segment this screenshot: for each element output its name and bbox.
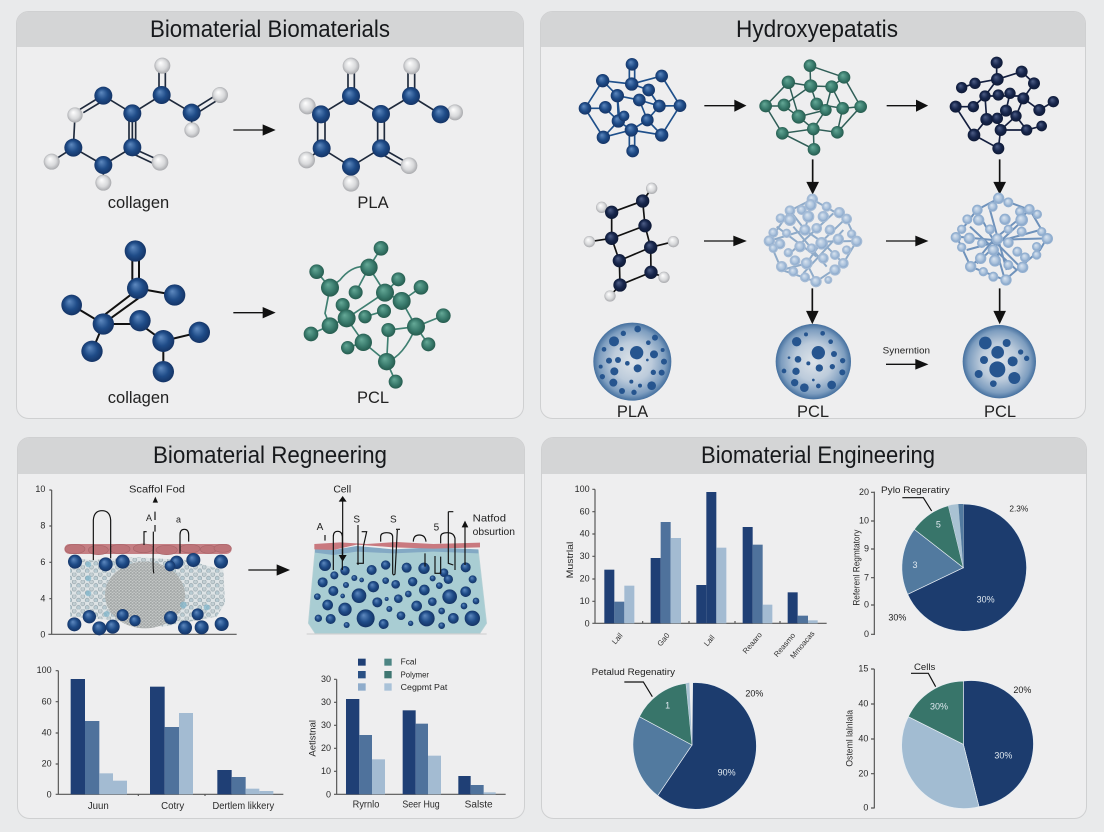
arrow xyxy=(233,308,274,317)
diagram: cell-seeded scaffold: A xyxy=(317,522,324,533)
arrow xyxy=(808,159,818,193)
axis title: Referenl Regmtatory xyxy=(852,529,862,606)
pie chart: cells: 40 xyxy=(858,734,868,744)
pie chart: regeneratory: 10 xyxy=(859,516,869,526)
label: scaffold: Scaffol Fod xyxy=(129,485,185,496)
molecule: PLA xyxy=(298,58,463,192)
heading: Hydroxyepatatis xyxy=(736,16,898,43)
arrow xyxy=(248,565,288,575)
pie chart: regeneratory: 20 xyxy=(859,487,869,497)
arrow xyxy=(807,288,817,322)
bar chart: right: 20 xyxy=(321,743,331,753)
pie chart: cells: 40 xyxy=(858,699,868,709)
molecule: green cluster xyxy=(759,59,867,156)
panel: Biomaterial Engineering xyxy=(542,438,1086,818)
diagram: scaffold cross-section: 8 xyxy=(40,521,45,531)
molecule: dark cluster xyxy=(950,57,1059,154)
diagram: cell-seeded scaffold: 5 xyxy=(434,523,440,534)
bar chart: left: 60 xyxy=(42,696,52,706)
panel: Biomaterial Regneering xyxy=(18,438,524,818)
pie chart: retained regeneratory: 90% xyxy=(718,768,736,778)
bar chart: material: Reasmo xyxy=(772,631,797,659)
sphere: PCL xyxy=(776,324,851,399)
axis title: Mustrlal xyxy=(565,542,575,578)
bar chart: right: Ryrnlo xyxy=(353,800,379,811)
arrow xyxy=(995,288,1005,322)
bar chart: right: 0 xyxy=(326,789,331,799)
label: PCL: PCL xyxy=(357,389,389,407)
bar chart: left: 100 xyxy=(37,665,52,675)
molecule: blue cluster xyxy=(579,58,686,157)
diagram: scaffold cross-section: 6 xyxy=(40,557,45,567)
label: collagen: collagen xyxy=(108,194,169,212)
bar chart: right: Salste xyxy=(465,800,493,811)
bar chart: material: 30 xyxy=(580,551,590,561)
bar chart: material: 100 xyxy=(575,484,590,494)
bar chart: material: Ga0 xyxy=(655,631,672,648)
label: PCL: PCL xyxy=(797,403,829,421)
diagram: scaffold cross-section: 4 xyxy=(40,593,45,603)
pie chart: cells: 0 xyxy=(863,803,868,813)
molecule: light blue cluster 2 xyxy=(951,193,1052,285)
pie chart: retained regeneratory xyxy=(592,667,763,809)
pie chart: regeneratory: 5 xyxy=(936,519,941,529)
bar chart: material: Lail xyxy=(610,631,625,646)
pie chart: cells: 20 xyxy=(858,768,868,778)
molecule: collagen top xyxy=(44,58,228,191)
molecules panel 1 xyxy=(44,58,463,407)
panel: Hydroxyepatatis xyxy=(540,12,1086,421)
arrow xyxy=(886,237,927,245)
bar chart: material: Lail xyxy=(702,633,717,648)
sphere: PLA xyxy=(593,323,671,401)
arrow xyxy=(704,237,745,245)
bar chart: material: Reaaro xyxy=(741,630,764,656)
arrow xyxy=(704,101,745,111)
heading: Biomaterial Regneering xyxy=(153,442,387,469)
bar chart: right: 30 xyxy=(321,720,331,730)
diagram: scaffold cross-section: 10 xyxy=(35,484,45,494)
pie chart: cells: 30% xyxy=(930,702,948,712)
axis title: Osteml lalnlala xyxy=(844,710,854,767)
bar chart: material: 10 xyxy=(580,596,590,606)
diagram: scaffold cross-section xyxy=(35,484,237,639)
label: PLA: PLA xyxy=(617,403,648,421)
molecule: light blue cluster xyxy=(764,194,862,287)
pie chart: regeneratory: 3 xyxy=(912,560,917,570)
bar chart: left: Dertlem likkery xyxy=(212,801,274,812)
label: synthesis step: Synerntion xyxy=(883,345,930,355)
bar chart: left: Juun xyxy=(88,801,109,812)
molecule: PCL xyxy=(304,241,451,389)
label: PCL: PCL xyxy=(984,403,1016,421)
pie chart: regeneratory: 2.3% xyxy=(1009,503,1029,513)
pie chart: regeneratory xyxy=(852,485,1029,639)
reaction diagrams xyxy=(579,57,1059,193)
bar chart: material: 20 xyxy=(580,574,590,584)
pie chart: regeneratory: 30% xyxy=(888,612,906,622)
label: PLA: PLA xyxy=(357,194,389,212)
heading: Biomaterial Engineering xyxy=(701,442,935,469)
bar chart: material: 40 xyxy=(580,529,590,539)
bar chart: material xyxy=(565,484,827,660)
label: collagen: collagen xyxy=(108,389,169,407)
pie chart: cells: 15 xyxy=(858,664,868,674)
legend: Fcal xyxy=(401,657,417,667)
pie chart: regeneratory: Pylo Regeratiry xyxy=(881,485,950,495)
pie chart: cells: 20% xyxy=(1013,685,1031,695)
pie chart: regeneratory: 30% xyxy=(977,594,995,604)
pie chart: retained regeneratory: Petalud Regenatiry xyxy=(592,667,676,677)
legend: Cegpmt Pat xyxy=(401,682,448,692)
diagram: scaffold cross-section: A xyxy=(146,513,152,523)
sphere: PCL large pores xyxy=(963,325,1036,398)
pie chart: regeneratory: 0 xyxy=(864,600,869,610)
pie chart: regeneratory: 9 xyxy=(864,544,869,554)
heading: Biomaterial Biomaterials xyxy=(150,16,390,43)
bar chart: left: 20 xyxy=(42,759,52,769)
bar chart: right: 10 xyxy=(321,766,331,776)
legend: Polymer xyxy=(401,669,429,679)
bar chart: left xyxy=(37,665,283,812)
axis title: Aetlstnal xyxy=(308,720,318,757)
pie chart: cells: 30% xyxy=(994,750,1012,760)
arrow xyxy=(886,360,927,369)
label: scaffold formation: Natfod xyxy=(473,514,506,525)
label: scaffold formation: obsurtion xyxy=(473,527,515,538)
bar chart: material: Mmoacas xyxy=(788,629,817,660)
molecule: collagen bottom xyxy=(61,240,210,382)
pie chart: cells: Cells xyxy=(914,662,936,672)
pie chart: regeneratory: 0 xyxy=(864,629,869,639)
pie chart: retained regeneratory: 20% xyxy=(745,689,763,699)
diagram: cell-seeded scaffold: S xyxy=(390,515,397,526)
bar chart: material: 0 xyxy=(585,618,590,628)
arrow xyxy=(233,125,274,135)
bar chart: left: Cotry xyxy=(161,801,184,812)
diagram: scaffold cross-section: a xyxy=(176,515,181,525)
label: cell: Cell xyxy=(333,485,351,496)
bar chart: right: 30 xyxy=(321,674,331,684)
bar chart: right: Seer Hug xyxy=(402,800,440,811)
pie chart: retained regeneratory: 1 xyxy=(665,700,670,710)
diagram: scaffold cross-section: 0 xyxy=(40,629,45,639)
diagram: cell-seeded scaffold: S xyxy=(353,515,360,526)
label: scaffold formation xyxy=(473,514,515,538)
bar chart: left: 40 xyxy=(42,728,52,738)
panel: Biomaterial Biomaterials xyxy=(16,12,524,418)
arrow xyxy=(887,101,927,111)
bar chart: right xyxy=(308,657,506,811)
bar chart: material: 60 xyxy=(580,506,590,516)
pie chart: regeneratory: 7 xyxy=(864,572,869,582)
arrow xyxy=(995,159,1005,193)
bar chart: left: 0 xyxy=(47,789,52,799)
molecule: dark hexagon xyxy=(584,183,679,302)
bar chart: right: 30 xyxy=(321,697,331,707)
pie chart: cells xyxy=(844,662,1033,813)
legend xyxy=(358,657,448,692)
diagram: cell-seeded scaffold xyxy=(307,485,515,634)
